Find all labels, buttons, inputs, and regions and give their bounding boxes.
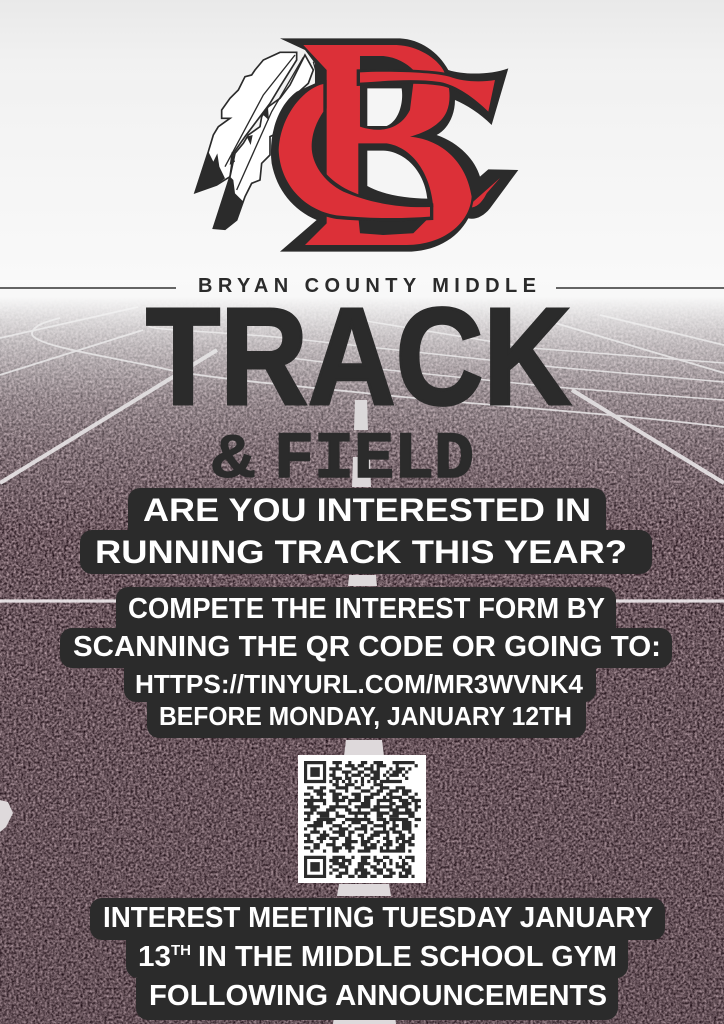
callout: interest meeting: IN THE MIDDLE SCHOOL GYM [198, 941, 617, 973]
callout: interest meeting: 13 [138, 941, 171, 973]
callout: interest form instructions: COMPETE THE INTEREST FORM BY [128, 593, 605, 625]
callout: interest form instructions: BEFORE MONDAY, JANUARY 12TH [159, 701, 572, 731]
rule right [556, 287, 724, 289]
logo: BC monogram with feathers [195, 38, 518, 252]
title: & FIELD: FIELD [274, 422, 474, 497]
QR code [298, 755, 426, 883]
letter outline [271, 38, 518, 252]
title: TRACK: TRACK [146, 280, 571, 434]
rule left [0, 287, 176, 289]
callout: are you interested [80, 488, 652, 574]
callout: are you interested: RUNNING TRACK THIS YEAR? [95, 534, 627, 570]
icon: feathers [195, 52, 317, 229]
callout: interest meeting: FOLLOWING ANNOUNCEMENTS [149, 980, 607, 1012]
title: & FIELD: & [210, 423, 256, 490]
callout: interest form instructions: SCANNING THE QR CODE OR GOING TO: [73, 631, 661, 663]
callout: interest meeting [90, 898, 665, 1020]
letter C [275, 69, 505, 221]
callout: interest form instructions: HTTPS://TINYURL.COM/MR3WVNK4 [135, 669, 584, 699]
B counters [358, 56, 433, 235]
letter B [303, 45, 472, 245]
callout: interest meeting: TH [171, 942, 191, 959]
callout: interest meeting: INTEREST MEETING TUESDAY JANUARY [103, 902, 653, 934]
heading: Bryan County Middle: BRYAN COUNTY MIDDLE [198, 275, 536, 297]
callout: interest form instructions [60, 587, 672, 738]
callout: are you interested: ARE YOU INTERESTED IN [143, 492, 591, 528]
